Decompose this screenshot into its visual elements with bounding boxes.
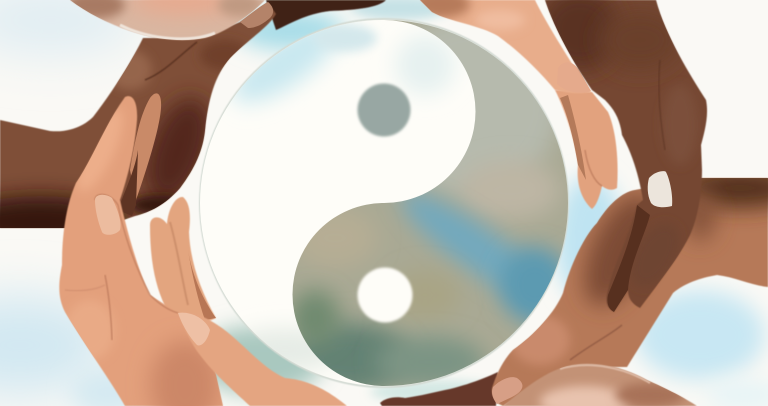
lower fingers (555, 90, 618, 209)
outer ring (200, 19, 568, 387)
finger crease (105, 275, 112, 340)
thumb nail (178, 313, 210, 345)
finger crease (145, 42, 197, 80)
yin yang symbol (198, 18, 570, 388)
nail (571, 63, 591, 92)
hand: fair lower left (59, 96, 347, 406)
finger gap (659, 60, 665, 150)
hand: tan upper right (410, 0, 618, 209)
second finger fold (95, 195, 178, 313)
nail (240, 2, 273, 28)
fingertips behind fair hand (130, 93, 161, 200)
fingers behind (150, 197, 216, 330)
hand: dark fingers at top (266, 0, 386, 30)
dark half (292, 20, 568, 386)
palm and first finger (59, 96, 223, 406)
hand: dark brown from left (0, 2, 276, 248)
nail (492, 377, 522, 404)
thumb finger (420, 0, 591, 93)
finger crease (570, 325, 622, 360)
hand: medium brown lower right (380, 168, 768, 406)
nail (648, 171, 672, 207)
thumb (187, 317, 347, 406)
small dark dot (358, 84, 410, 136)
lower finger shadow (607, 205, 650, 312)
nail (95, 195, 121, 235)
hand: pale palm bottom (503, 364, 697, 406)
hand: dark brown upper right (540, 0, 707, 312)
light half (200, 20, 456, 386)
hand: pale palm top (65, 0, 265, 40)
small light dot (358, 268, 412, 322)
